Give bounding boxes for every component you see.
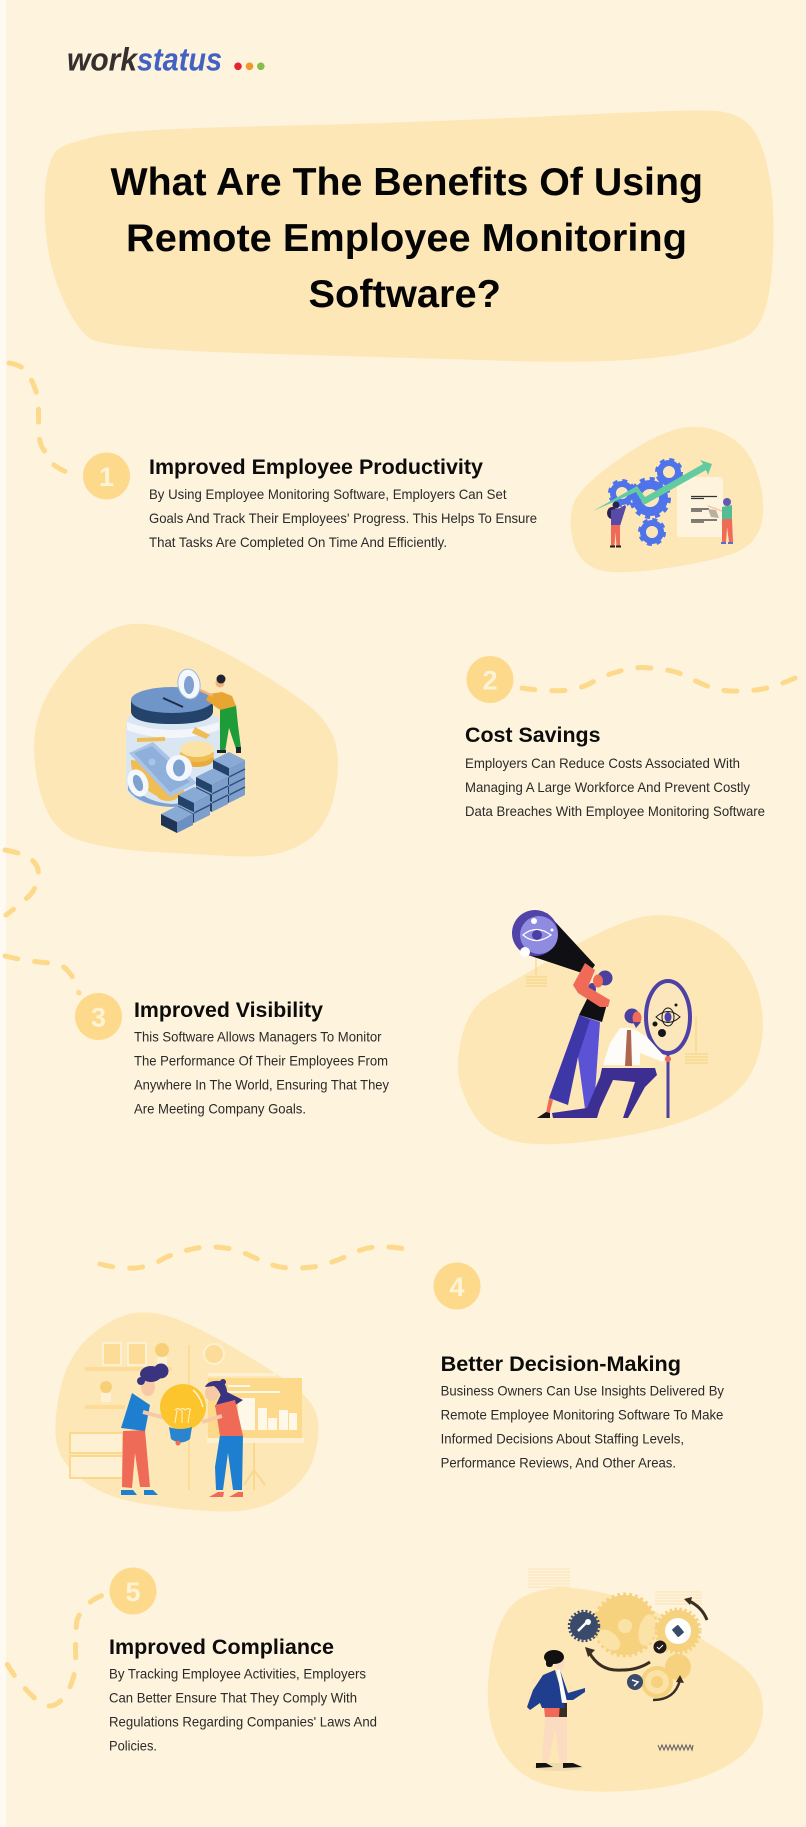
text block: step 5 description: By Tracking Employee Activities, Employers xyxy=(109,1666,366,1682)
text block: step 1 description: That Tasks Are Completed On Time And Efficiently. xyxy=(149,534,447,550)
illustration: person with cog wheels xyxy=(488,1569,763,1792)
title xyxy=(110,161,703,316)
number badge 1: 1 xyxy=(99,462,114,492)
dashed connector to step 3 xyxy=(5,956,79,993)
text block: step 2 description: Employers Can Reduce Costs Associated With xyxy=(465,755,740,771)
number badge 3: 3 xyxy=(91,1002,106,1032)
heading: Better Decision-Making: Better Decision-Making xyxy=(441,1353,681,1376)
panel: step 2 xyxy=(34,624,806,857)
illustration: two people holding a light bulb xyxy=(55,1312,318,1512)
number badge 2: 2 xyxy=(482,666,498,696)
text block: step 1 description: By Using Employee Monitoring Software, Employers Can Set xyxy=(149,486,507,502)
illustration: telescope and magnifier figures xyxy=(458,910,763,1144)
panel: step 5 xyxy=(109,1568,763,1792)
heading: Improved Visibility: Improved Visibility xyxy=(134,999,323,1022)
text block: step 4 description xyxy=(441,1383,724,1471)
number badge 3 xyxy=(75,993,122,1040)
heading: Cost Savings: Cost Savings xyxy=(465,724,600,747)
dashed connector to step 1 xyxy=(9,363,75,475)
text block: step 5 description: Can Better Ensure That They Comply With xyxy=(109,1690,357,1706)
title: Remote Employee Monitoring xyxy=(126,217,687,260)
panel: step 1 xyxy=(83,427,763,572)
illustration: coin jar and server stacks xyxy=(34,624,338,857)
panel: step 3 xyxy=(75,910,763,1144)
text block: step 2 description: Data Breaches With Employee Monitoring Software xyxy=(465,803,765,819)
text block: step 2 description: Managing A Large Workforce And Prevent Costly xyxy=(465,779,750,795)
illustration: gears and growth arrow xyxy=(571,427,763,572)
text block: step 3 description: This Software Allows Managers To Monitor xyxy=(134,1029,382,1045)
dashed connector above step 4 xyxy=(100,1247,411,1268)
text block: step 2 description xyxy=(465,755,765,819)
text block: step 5 description: Policies. xyxy=(109,1738,157,1754)
logo: workstatus: status xyxy=(137,42,222,78)
title: Software? xyxy=(308,273,501,316)
text block: step 3 description: Are Meeting Company Goals. xyxy=(134,1101,306,1117)
title: What Are The Benefits Of Using xyxy=(110,161,703,204)
logo: workstatus: work xyxy=(67,42,139,78)
text block: step 1 description xyxy=(149,486,537,550)
text block: step 4 description: Informed Decisions About Staffing Levels, xyxy=(441,1431,684,1447)
text block: step 4 description: Performance Reviews, And Other Areas. xyxy=(441,1455,676,1471)
number badge 5 xyxy=(110,1568,156,1614)
panel: title blob with heading xyxy=(45,111,774,362)
text block: step 3 description: Anywhere In The World, Ensuring That They xyxy=(134,1077,389,1093)
text block: step 5 description xyxy=(109,1666,377,1754)
dashed connector from step 2 xyxy=(522,668,806,691)
panel: step 4 xyxy=(55,1262,724,1512)
text block: step 4 description: Remote Employee Monitoring Software To Make xyxy=(441,1407,724,1423)
logo: workstatus xyxy=(67,42,265,78)
text block: step 4 description: Business Owners Can Use Insights Delivered By xyxy=(441,1383,724,1399)
text block: step 1 description: Goals And Track Their Employees' Progress. This Helps To Ensure xyxy=(149,510,537,526)
dashed connector: loop at left edge xyxy=(5,850,38,915)
number badge 5: 5 xyxy=(125,1577,141,1607)
dashed connector to step 5 xyxy=(3,1593,109,1706)
text block: step 3 description: The Performance Of Their Employees From xyxy=(134,1053,388,1069)
number badge 4: 4 xyxy=(449,1272,465,1302)
number badge 1 xyxy=(83,452,130,500)
text block: step 5 description: Regulations Regarding Companies' Laws And xyxy=(109,1714,377,1730)
heading: Improved Employee Productivity: Improved Employee Productivity xyxy=(149,456,483,479)
number badge 2 xyxy=(466,656,514,703)
text block: step 3 description xyxy=(134,1029,389,1117)
number badge 4 xyxy=(434,1262,480,1310)
heading: Improved Compliance: Improved Compliance xyxy=(109,1636,334,1659)
